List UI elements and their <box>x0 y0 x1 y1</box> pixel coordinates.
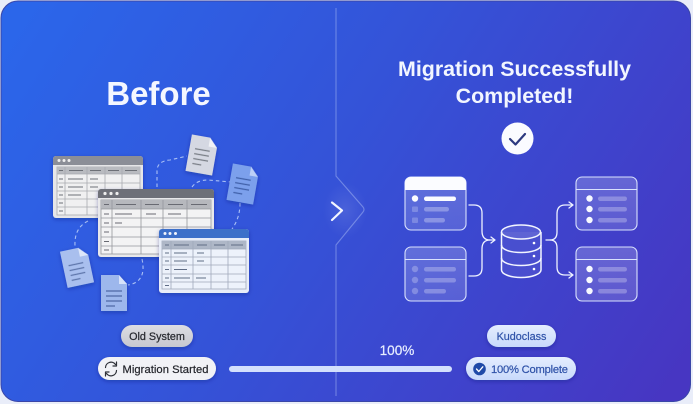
icon: pale blue document <box>101 275 127 311</box>
icon: database cylinder <box>502 225 541 278</box>
status: 100% Complete: 100% Complete <box>491 364 568 376</box>
progress label: 100%: 100% <box>380 343 414 358</box>
heading: Migration Successfully Completed: Completed! <box>456 84 573 108</box>
source window 2 <box>405 247 466 301</box>
old table window 2 <box>98 189 214 257</box>
dashed connectors between old files and tables <box>75 156 240 285</box>
label: Old System: Old System <box>129 331 185 343</box>
arrows out to target windows <box>546 202 573 278</box>
blue table window 3 <box>159 229 249 293</box>
progress bar <box>229 366 452 372</box>
icon: light blue document <box>60 246 94 288</box>
heading: Before: Before <box>106 75 211 112</box>
old table window 1 <box>53 156 143 218</box>
source window 1, highlighted <box>405 177 466 230</box>
heading: Migration Successfully Completed <box>398 57 631 108</box>
divider line with chevron notch <box>336 8 364 396</box>
icon: success check badge <box>502 122 534 154</box>
status: 100% Complete <box>466 357 576 380</box>
heading: Migration Successfully Completed: Migration Successfully <box>398 57 631 81</box>
status: Migration Started: Migration Started <box>122 364 208 376</box>
status: Migration Started <box>98 357 216 380</box>
label: Old System <box>121 325 193 347</box>
arrows into the database <box>469 205 495 276</box>
icon: chevron arrow <box>332 202 342 220</box>
target window 2 <box>576 247 637 301</box>
icon: refresh arrows <box>106 362 116 376</box>
label: Kudoclass <box>487 325 556 347</box>
chevron glow <box>323 182 367 238</box>
icon: grey document <box>185 134 219 176</box>
label: Kudoclass: Kudoclass <box>497 331 547 343</box>
icon: blue document <box>226 163 260 205</box>
icon: complete check <box>473 363 486 375</box>
target window 1 <box>576 177 637 230</box>
